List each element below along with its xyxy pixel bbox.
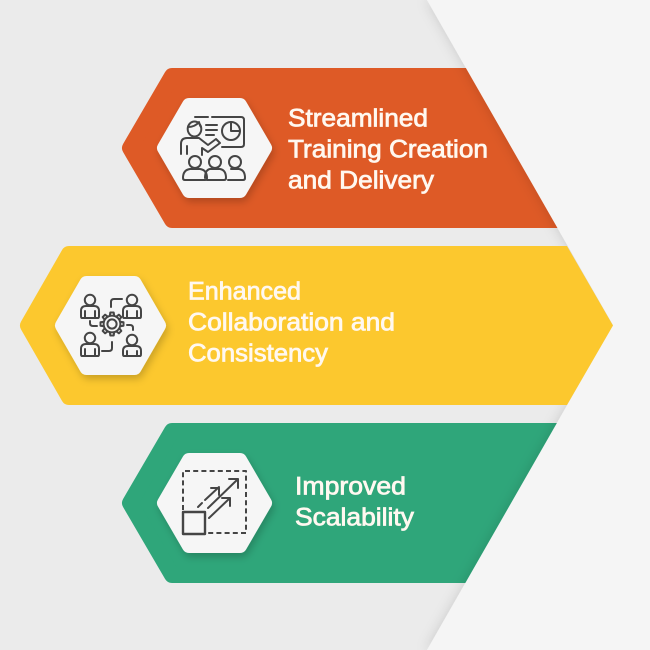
icon: team around a gear — [81, 295, 141, 356]
heading: orange banner text: and Delivery — [288, 166, 435, 194]
panel: orange banner — [130, 76, 600, 220]
heading: green banner text — [295, 472, 415, 532]
panel: yellow icon badge — [62, 283, 159, 368]
heading: yellow banner text — [188, 278, 395, 368]
heading: green banner text: Scalability — [295, 504, 415, 532]
icon: scaling square with arrows — [183, 471, 246, 534]
panel: orange icon badge — [164, 105, 265, 191]
heading: yellow banner text: Consistency — [188, 340, 329, 368]
panel: green banner — [130, 431, 600, 575]
background angled overlay — [427, 0, 650, 650]
icon: trainer presenting to audience — [181, 117, 245, 180]
heading: orange banner text: Streamlined — [288, 104, 428, 132]
heading: yellow banner text: Collaboration and — [188, 308, 395, 336]
heading: orange banner text: Training Creation — [288, 136, 488, 164]
heading: green banner text: Improved — [295, 472, 406, 500]
heading: orange banner text — [288, 104, 488, 194]
panel: yellow banner — [28, 246, 613, 405]
heading: yellow banner text: Enhanced — [188, 278, 301, 306]
panel: green icon badge — [164, 460, 265, 546]
